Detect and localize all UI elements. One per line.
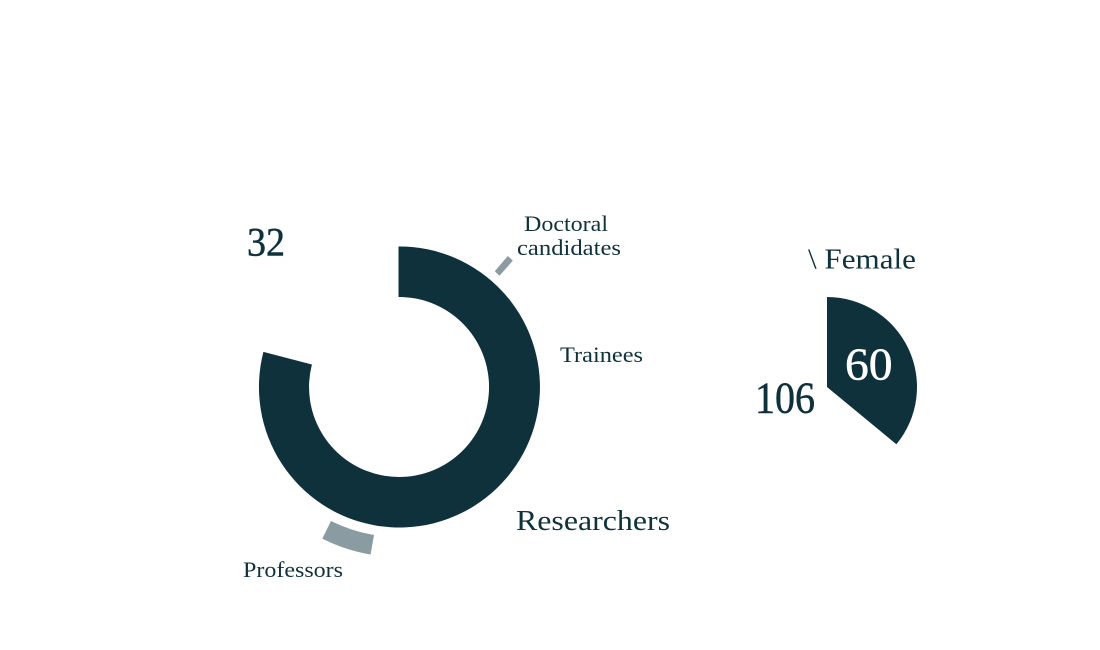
pie sector: female share bbox=[827, 297, 917, 444]
label: doctoral candidates bbox=[517, 211, 621, 260]
label: professors: Professors bbox=[243, 557, 343, 582]
label: doctoral candidates: Doctoral bbox=[524, 211, 608, 236]
label: trainees: Trainees bbox=[560, 342, 643, 367]
arc: professors bbox=[322, 521, 374, 554]
number: 60 female: 60 bbox=[845, 338, 892, 390]
label: researchers: Researchers bbox=[516, 505, 670, 537]
panel: gender pie chart bbox=[755, 244, 917, 444]
label: doctoral candidates: candidates bbox=[517, 235, 621, 260]
number: 106 total: 106 bbox=[755, 374, 815, 422]
arc: doctoral candidates bbox=[495, 256, 513, 276]
panel: staff categories donut chart bbox=[243, 211, 670, 582]
donut arc: researchers bbox=[259, 246, 540, 527]
number: 32: 32 bbox=[247, 220, 285, 264]
heading: female: \ Female bbox=[808, 244, 916, 276]
